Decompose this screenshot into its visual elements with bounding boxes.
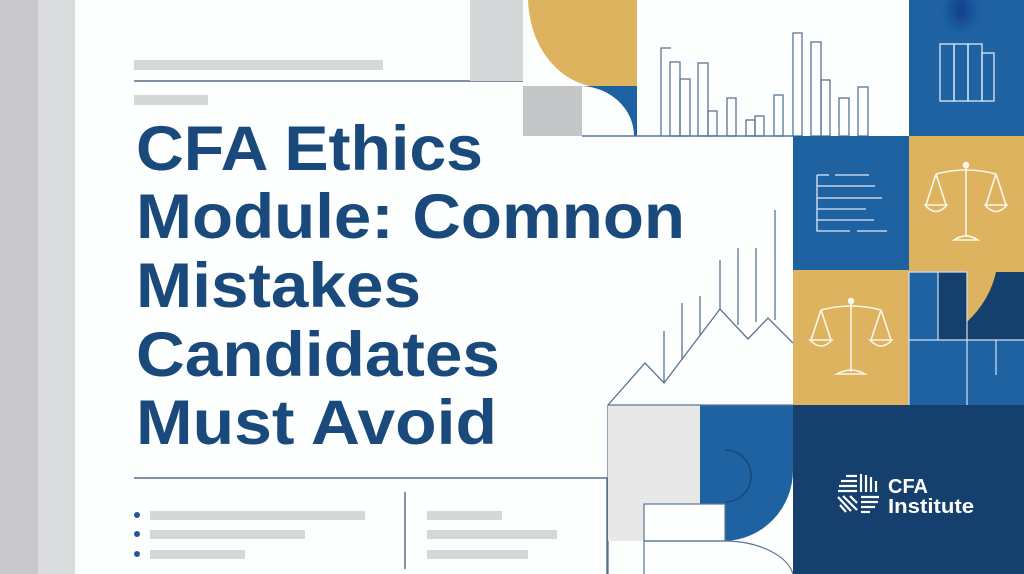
house line graphic [608,210,793,574]
title: Module: Comnon [136,182,685,252]
header placeholder bars [134,0,523,105]
mosaic blocks right [909,270,1024,405]
decorative gold and blue shapes [523,0,637,136]
navy logo panel [793,405,1024,574]
left page edge strips [0,0,75,574]
title: Candidates [136,320,500,390]
gold square with scales icon lower [793,270,909,405]
lower gray and blue blocks [608,405,793,574]
top-right blue block with bar icon [909,0,1024,136]
icon: CFA logo mark [838,474,879,512]
navy logo panel: CFA [888,476,928,498]
title [136,114,685,458]
bar chart [582,33,868,136]
navy logo panel: Institute [888,496,974,518]
title: CFA Ethics [136,114,483,184]
title: Mistakes [136,251,421,321]
title: Must Avoid [136,388,497,458]
footer divider and bullets [134,478,608,574]
gold square with scales icon [909,136,1024,270]
blue square with document icon [793,136,909,270]
